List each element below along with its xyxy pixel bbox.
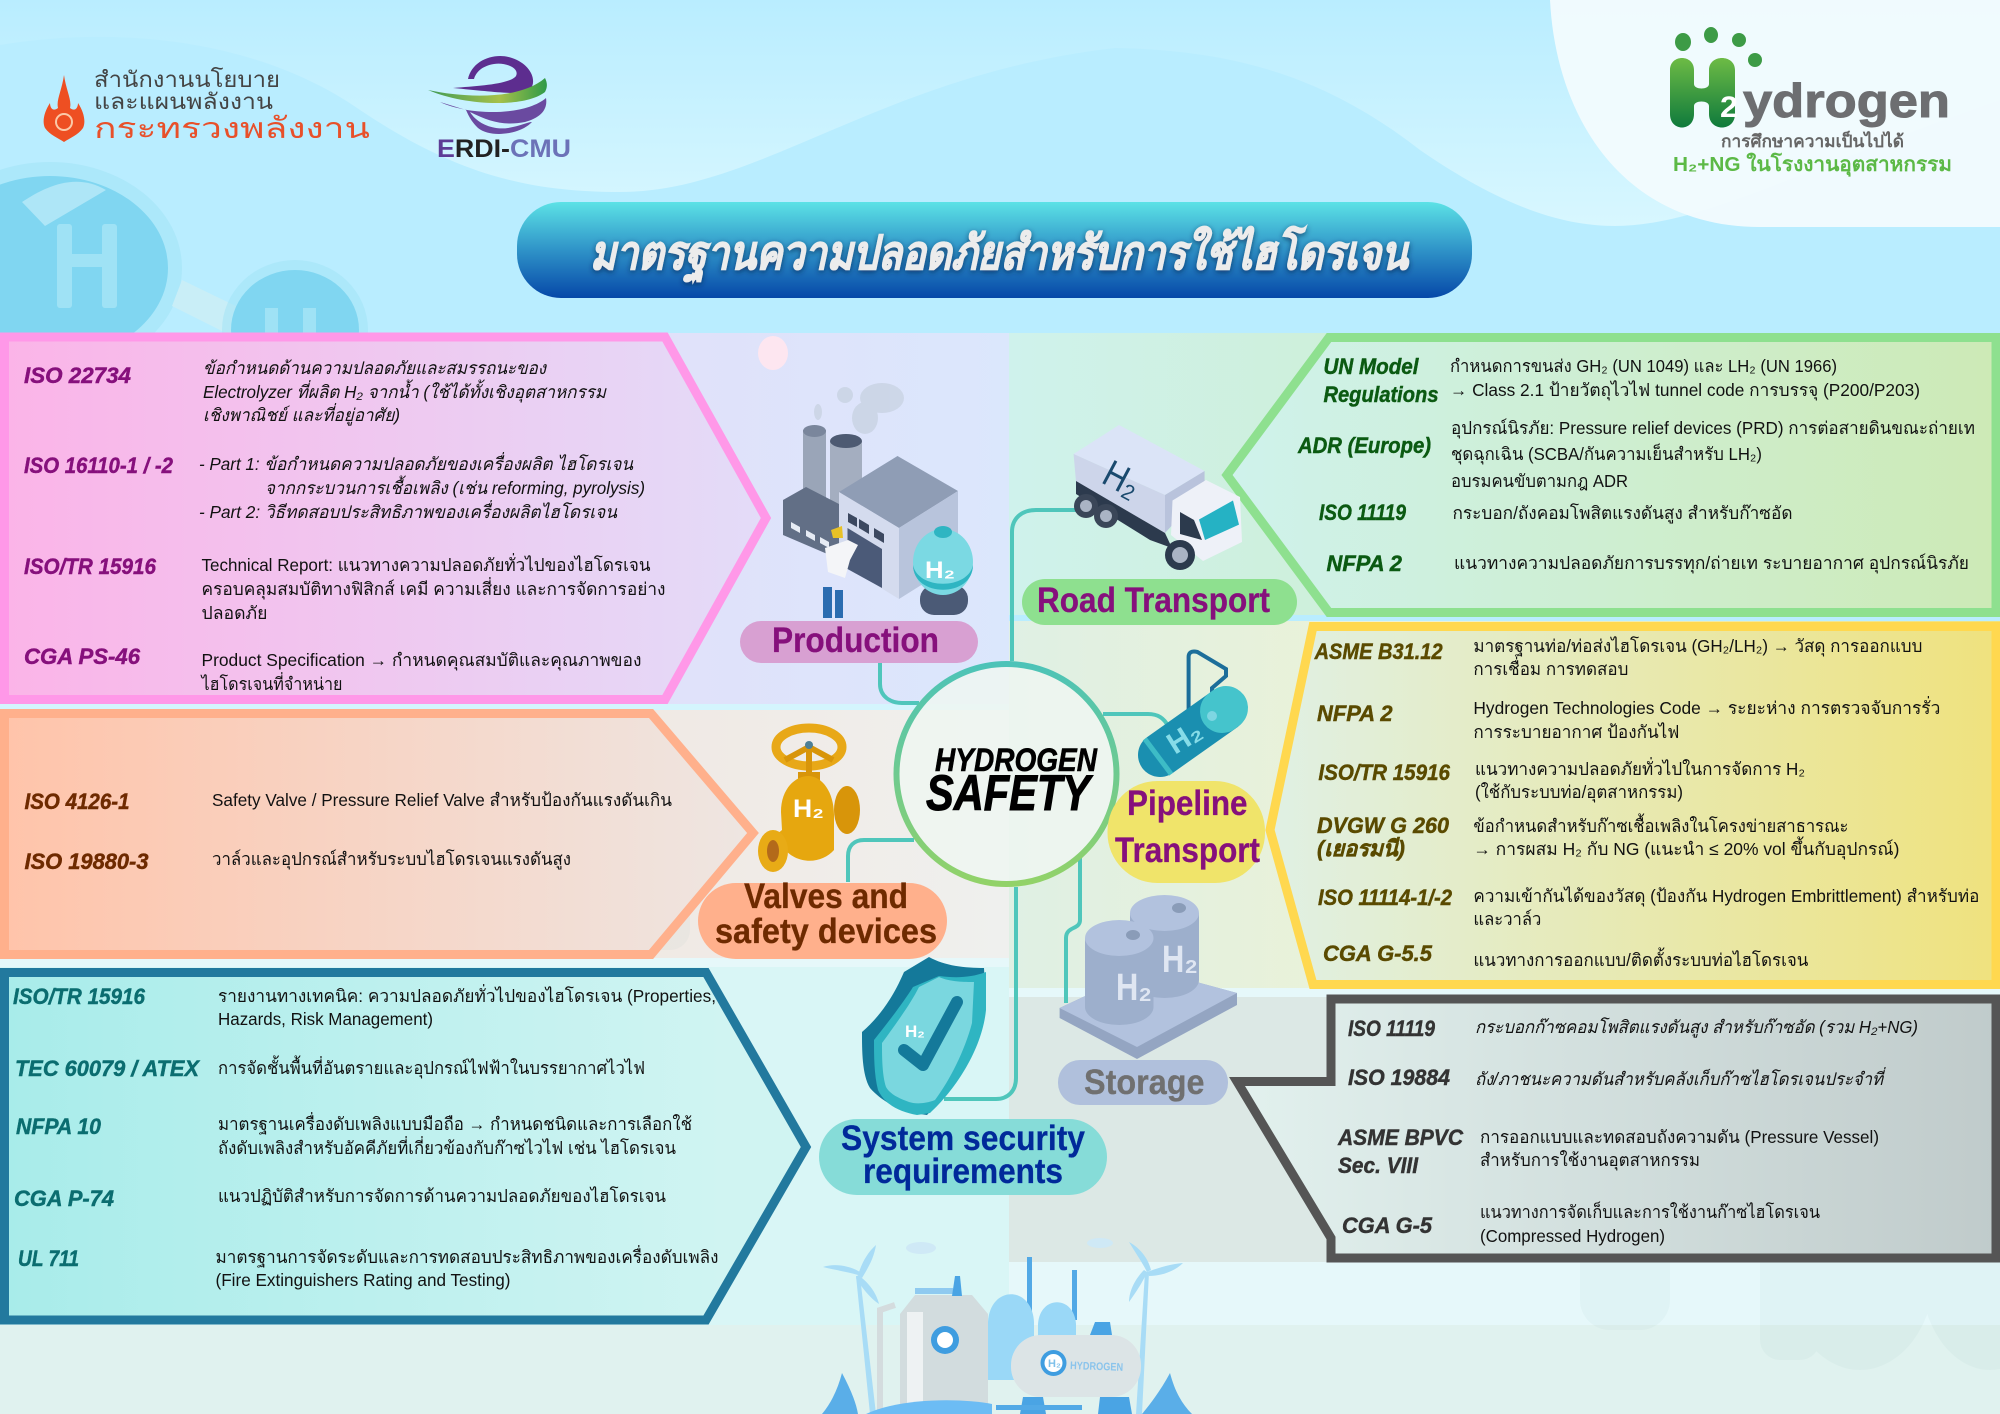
standard: UL 711: (Fire Extinguishers Rating and Testing) xyxy=(216,1270,510,1290)
standard: CGA G-5: (Compressed Hydrogen) xyxy=(1480,1226,1665,1246)
central hub: Hydrogen Safety xyxy=(896,664,1116,884)
organisation logo: EPPO: กระทรวงพลังงาน xyxy=(94,113,370,145)
wind turbine left xyxy=(823,1245,879,1414)
label: Production: Production xyxy=(772,621,939,660)
wind turbine right xyxy=(1129,1242,1183,1414)
standard: ASME B31.12: มาตรฐานท่อ/ท่อส่งไฮโดรเจน (GH₂/LH₂) → วัสดุ การออกแบบ xyxy=(1473,636,1922,657)
standard: ISO 22734: Electrolyzer ที่ผลิต H₂ จากน้ำ (ใช้ได้ทั้งเชิงอุตสาหกรรม xyxy=(203,379,607,403)
standard: CGA PS-46: ไฮโดรเจนที่จำหน่าย xyxy=(200,672,342,694)
standard: ISO 16110: - Part 1: ข้อกำหนดความปลอดภัยของเครื่องผลิต ไฮโดรเจน xyxy=(199,452,634,474)
icon: security shield xyxy=(862,957,986,1115)
standard: ISO/TR 15916 xyxy=(1318,757,1805,803)
standard: UN Model Regulations: → Class 2.1 ป้ายวัตถุไวไฟ tunnel code การบรรจุ (P200/P203) xyxy=(1450,380,1920,401)
standard: ISO 11114: ISO 11114-1/-2 xyxy=(1318,885,1453,910)
standard: ASME BPVC: Sec. VIII xyxy=(1338,1153,1419,1178)
standard: ISO 19880-3: วาล์วและอุปกรณ์สำหรับระบบไฮโดรเจนแรงดันสูง xyxy=(212,849,571,870)
standard: ISO/TR 15916: ISO/TR 15916 xyxy=(13,984,146,1009)
icon: small green circles xyxy=(1675,27,1762,67)
standard: ISO 16110: - Part 2: วิธีทดสอบประสิทธิภาพของเครื่องผลิตไฮโดรเจน xyxy=(199,500,618,522)
standard: ISO 11119: กระบอก/ถังคอมโพสิตแรงดันสูง สำหรับก๊าซอัด xyxy=(1452,503,1792,524)
standard: ISO 11119: ISO 11119 xyxy=(1319,500,1407,525)
project logo: Hydrogen: H₂+NG ในโรงงานอุตสาหกรรม xyxy=(1673,152,1952,177)
standard: NFPA 2 xyxy=(1317,696,1940,742)
panel: System security xyxy=(4,972,806,1320)
standard: UL 711: มาตรฐานการจัดระดับและการทดสอบประสิทธิภาพของเครื่องดับเพลิง xyxy=(216,1245,718,1268)
standard: CGA G-5 xyxy=(1342,1201,1820,1246)
standard: CGA G-5.5 xyxy=(1323,941,1808,970)
front tank xyxy=(1085,938,1154,1025)
icon: storage tanks xyxy=(1060,895,1237,1059)
label: Road Transport: Road Transport xyxy=(1037,581,1270,620)
grey pipes xyxy=(880,1305,895,1414)
title banner xyxy=(517,202,1472,298)
central hub: Hydrogen Safety: HYDROGEN xyxy=(935,742,1098,778)
standard: ADR (Europe): อุปกรณ์นิรภัย: Pressure relief devices (PRD) การต่อสายดินขณะถ่ายเท xyxy=(1451,418,1975,439)
standard: ISO 4126-1: ISO 4126-1 xyxy=(24,789,130,814)
standard: ISO 19884: ถัง/ภาชนะความดันสำหรับคลังเก็บก๊าซไฮโดรเจนประจำที่ xyxy=(1475,1067,1886,1089)
standard: ISO/TR 15916 xyxy=(24,553,666,623)
standard: ISO 11119 xyxy=(1319,500,1792,525)
standard: UL 711: UL 711 xyxy=(18,1246,79,1271)
icon: swirl xyxy=(428,56,547,134)
standard: ISO/TR 15916: ISO/TR 15916 xyxy=(24,554,157,579)
icon: hydrogen factory: H₂ xyxy=(925,557,955,584)
standard: ISO 22734 xyxy=(24,358,607,426)
ERDI-CMU wordmark: ERDI-CMU xyxy=(437,135,571,163)
label: System security requirements xyxy=(819,1119,1107,1195)
standard: CGA G-5: CGA G-5 xyxy=(1342,1213,1433,1238)
panel: Storage xyxy=(1237,999,1996,1258)
standard: ISO 4126-1 xyxy=(24,789,672,814)
stacks and domes xyxy=(1027,1257,1032,1317)
label: Storage xyxy=(1058,1060,1228,1105)
standard: ISO 19884 xyxy=(1348,1065,1886,1090)
standard: ISO/TR 15916: Technical Report: แนวทางความปลอดภัยทั่วไปของไฮโดรเจน xyxy=(202,553,651,575)
organisation logo: EPPO: และแผนพลังงาน xyxy=(94,89,273,114)
standard: DVGW G 260: → การผสม H₂ กับ NG (แนะนำ ≤ 20% vol ขึ้นกับอุปกรณ์) xyxy=(1473,836,1899,860)
back tank xyxy=(1130,913,1199,998)
illustration: hydrogen plant with wind turbines: HYDROGEN xyxy=(1070,1360,1123,1374)
standard: ISO/TR 15916: แนวทางความปลอดภัยทั่วไปในการจัดการ H₂ xyxy=(1475,757,1805,779)
agency name: สำนักงานนโยบาย xyxy=(94,67,280,92)
standard: ISO/TR 15916: Hazards, Risk Management) xyxy=(218,1009,433,1029)
standard: ISO/TR 15916: ISO/TR 15916 xyxy=(1318,760,1451,785)
standard: NFPA 2: แนวทางความปลอดภัยการบรรทุก/ถ่ายเท ระบายอากาศ อุปกรณ์นิรภัย xyxy=(1454,553,1969,574)
standard: NFPA 2: NFPA 2 xyxy=(1317,701,1393,726)
icon: pipeline: H₂ xyxy=(1161,714,1208,761)
icon: flame xyxy=(44,75,84,142)
standard: ASME B31.12: ASME B31.12 xyxy=(1314,639,1443,664)
standard: CGA G-5.5: แนวทางการออกแบบ/ติดตั้งระบบท่อไฮโดรเจน xyxy=(1473,947,1808,970)
light wave background xyxy=(0,0,2000,226)
standard: UN Model Regulations: Regulations xyxy=(1324,382,1438,407)
label: Valves and safety devices xyxy=(698,877,947,959)
standard: ADR (Europe) xyxy=(1297,418,1975,491)
illustration: hydrogen plant with wind turbines: H₂ xyxy=(1048,1358,1061,1370)
standard: NFPA 2 xyxy=(1326,551,1969,576)
tank legs and platform xyxy=(1020,1397,1132,1414)
icon: gate valve: H₂ xyxy=(793,795,824,823)
project logo: Hydrogen xyxy=(1670,27,1952,177)
standard: TEC 60079 / ATEX: TEC 60079 / ATEX xyxy=(15,1056,200,1081)
central hub: Hydrogen Safety: SAFETY xyxy=(926,765,1094,821)
standard: ISO/TR 15916: รายงานทางเทคนิค: ความปลอดภัยทั่วไปของไฮโดรเจน (Properties, xyxy=(218,984,716,1006)
standard: ISO 11119 xyxy=(1348,1016,1918,1041)
standard: ASME BPVC: ASME BPVC xyxy=(1337,1125,1464,1150)
standard: CGA G-5: แนวทางการจัดเก็บและการใช้งานก๊าซไฮโดรเจน xyxy=(1480,1201,1820,1222)
standard: CGA PS-46 xyxy=(24,644,642,694)
standard: ISO 22734: ISO 22734 xyxy=(24,363,131,388)
title banner: มาตรฐานความปลอดภัยสำหรับการใช้ไฮโดรเจน xyxy=(590,225,1410,284)
standard: NFPA 10 xyxy=(16,1112,692,1158)
standard: ISO 19880-3 xyxy=(24,849,571,874)
large green H xyxy=(1670,58,1735,128)
quadrant backgrounds xyxy=(0,333,2000,1325)
faded factory silhouettes xyxy=(170,860,2000,1370)
standard: ASME B31.12: การเชื่อม การทดสอบ xyxy=(1473,657,1628,679)
icon: tanker truck xyxy=(1074,425,1242,570)
standard: UL 711 xyxy=(18,1245,718,1290)
low block xyxy=(783,487,839,559)
label: Valves and safety devices: safety devices xyxy=(715,912,937,951)
icon: pipeline xyxy=(1156,652,1226,761)
standard: ISO 16110: ISO 16110-1 / -2 xyxy=(24,453,174,478)
standard: NFPA 10: ถังดับเพลิงสำหรับอัคคีภัยที่เกี่ยวข้องกับก๊าซไวไฟ เช่น ไฮโดรเจน xyxy=(218,1136,676,1158)
standard: CGA PS-46: CGA PS-46 xyxy=(24,644,141,669)
standard: ISO 22734: เชิงพาณิชย์ และที่อยู่อาศัย) xyxy=(203,403,400,426)
label: System security requirements: requirements xyxy=(863,1152,1063,1191)
label: Pipeline Transport xyxy=(1108,781,1265,883)
main building xyxy=(839,456,958,528)
standard: ASME BPVC xyxy=(1337,1125,1879,1178)
icon: storage tanks: H₂ xyxy=(1162,939,1198,981)
connector lines from hub xyxy=(848,510,1168,1099)
standard: ADR (Europe): ADR (Europe) xyxy=(1297,433,1431,458)
standard: ISO 19884: ISO 19884 xyxy=(1348,1065,1450,1090)
standard: TEC 60079 / ATEX xyxy=(15,1055,645,1081)
panel: Production xyxy=(4,337,766,700)
H2 marking on truck: H₂ xyxy=(1096,453,1147,507)
label: Pipeline Transport: Pipeline xyxy=(1127,784,1248,823)
standard: CGA PS-46: Product Specification → กำหนดคุณสมบัติและคุณภาพของ xyxy=(202,650,642,671)
standard: DVGW G 260: (เยอรมนี) xyxy=(1317,836,1405,861)
standard: TEC 60079 / ATEX: การจัดชั้นพื้นที่อันตรายและอุปกรณ์ไฟฟ้าในบรรยากาศไวไฟ xyxy=(218,1055,645,1079)
icon: storage tanks: H₂ xyxy=(1116,967,1152,1009)
standard: ISO 19880-3: ISO 19880-3 xyxy=(24,849,148,874)
standard: ASME B31.12 xyxy=(1314,636,1922,679)
standard: CGA P-74: แนวปฏิบัติสำหรับการจัดการด้านความปลอดภัยของไฮโดรเจน xyxy=(218,1186,666,1206)
standard: ISO 11119: กระบอกก๊าซคอมโพสิตแรงดันสูง สำหรับก๊าซอัด (รวม H₂+NG) xyxy=(1475,1017,1918,1038)
illustration: hydrogen plant with wind turbines xyxy=(822,1238,1192,1414)
wheels xyxy=(1074,494,1098,518)
icon: security shield: H₂ xyxy=(905,1022,925,1041)
lower page tint xyxy=(0,700,2000,1000)
panel: Pipeline Transport xyxy=(1270,626,1996,984)
standard: NFPA 10: NFPA 10 xyxy=(16,1114,102,1139)
standard: UN Model Regulations xyxy=(1324,354,1920,407)
smoke xyxy=(814,383,904,434)
label: System security requirements: System security xyxy=(841,1119,1085,1158)
label: Storage: Storage xyxy=(1084,1063,1204,1102)
standard: UN Model Regulations: กำหนดการขนส่ง GH₂ (UN 1049) และ LH₂ (UN 1966) xyxy=(1450,356,1837,376)
tagline: การศึกษาความเป็นไปได้ xyxy=(1721,129,1904,151)
chimneys xyxy=(803,430,826,515)
standard: ISO 16110 xyxy=(24,452,645,522)
icon: gate valve xyxy=(758,728,860,872)
standard: NFPA 2: NFPA 2 xyxy=(1326,551,1403,576)
panel: Road Transport xyxy=(1227,338,1996,612)
standard: NFPA 2: Hydrogen Technologies Code → ระยะห่าง การตรวจจับการรั่ว xyxy=(1473,696,1940,718)
white corner panel behind project logo xyxy=(1550,0,2000,227)
standard: ISO 11114: และวาล์ว xyxy=(1473,909,1541,929)
small clouds xyxy=(906,1238,1113,1254)
standard: NFPA 2: การระบายอากาศ ป้องกันไฟ xyxy=(1473,722,1679,742)
standard: ASME BPVC: การออกแบบและทดสอบถังความดัน (Pressure Vessel) xyxy=(1480,1127,1879,1147)
panel: Valves xyxy=(4,714,753,954)
standard: ADR (Europe): อบรมคนขับตามกฎ ADR xyxy=(1451,471,1628,491)
faded hydrogen molecules xyxy=(0,162,368,400)
standard: ISO 4126-1: Safety Valve / Pressure Relief Valve สำหรับป้องกันแรงดันเกิน xyxy=(212,790,672,810)
organisation logo: EPPO xyxy=(44,67,370,145)
standard: ISO 11114 xyxy=(1318,885,1979,929)
icon: hydrogen factory xyxy=(783,383,973,618)
organisation logo: ERDI-CMU xyxy=(428,56,571,163)
standard: ISO/TR 15916: (ใช้กับระบบท่อ/อุตสาหกรรม) xyxy=(1475,782,1683,803)
standard: DVGW G 260 xyxy=(1317,813,1899,861)
standard: CGA G-5.5: CGA G-5.5 xyxy=(1323,941,1433,966)
standard: CGA P-74 xyxy=(14,1186,666,1211)
standard: DVGW G 260: DVGW G 260 xyxy=(1317,813,1450,838)
standard: NFPA 10: มาตรฐานเครื่องดับเพลิงแบบมือถือ → กำหนดชนิดและการเลือกใช้ xyxy=(218,1112,692,1135)
grey vertical tank xyxy=(900,1295,988,1414)
standard: ISO 22734: ข้อกำหนดด้านความปลอดภัยและสมรรถนะของ xyxy=(203,358,547,378)
standard: ISO 16110: จากกระบวนการเชื้อเพลิง (เช่น reforming, pyrolysis) xyxy=(265,475,645,498)
wordmark: ydrogen xyxy=(1743,74,1950,127)
standard: ISO 11114: ความเข้ากันได้ของวัสดุ (ป้องกัน Hydrogen Embrittlement) สำหรับท่อ xyxy=(1473,886,1979,907)
subscript 2: 2 xyxy=(1720,91,1738,124)
standard: ISO/TR 15916: ครอบคลุมสมบัติทางฟิสิกส์ เคมี ความเสี่ยง และการจัดการอย่าง xyxy=(202,577,666,600)
horizontal hydrogen tank xyxy=(1011,1335,1141,1397)
cab xyxy=(1171,480,1242,561)
worker xyxy=(825,540,858,578)
decorative foliage xyxy=(822,1373,1192,1414)
hydrogen tank xyxy=(920,585,968,615)
standard: ISO/TR 15916 xyxy=(13,984,716,1029)
faint pink bubble xyxy=(758,336,788,370)
label: Valves and safety devices: Valves and xyxy=(744,877,908,916)
label: Pipeline Transport: Transport xyxy=(1115,831,1260,870)
standard: CGA P-74: CGA P-74 xyxy=(14,1186,114,1211)
standard: ISO 11119: ISO 11119 xyxy=(1348,1016,1436,1041)
standard: ADR (Europe): ชุดฉุกเฉิน (SCBA/กันความเย็นสำหรับ LH₂) xyxy=(1451,443,1762,465)
standard: ASME BPVC: สำหรับการใช้งานอุตสาหกรรม xyxy=(1480,1150,1700,1171)
standard: ISO/TR 15916: ปลอดภัย xyxy=(202,603,268,623)
standard: UN Model Regulations: UN Model xyxy=(1324,354,1419,379)
standard: DVGW G 260: ข้อกำหนดสำหรับก๊าซเชื้อเพลิงในโครงข่ายสาธารณะ xyxy=(1473,813,1848,836)
